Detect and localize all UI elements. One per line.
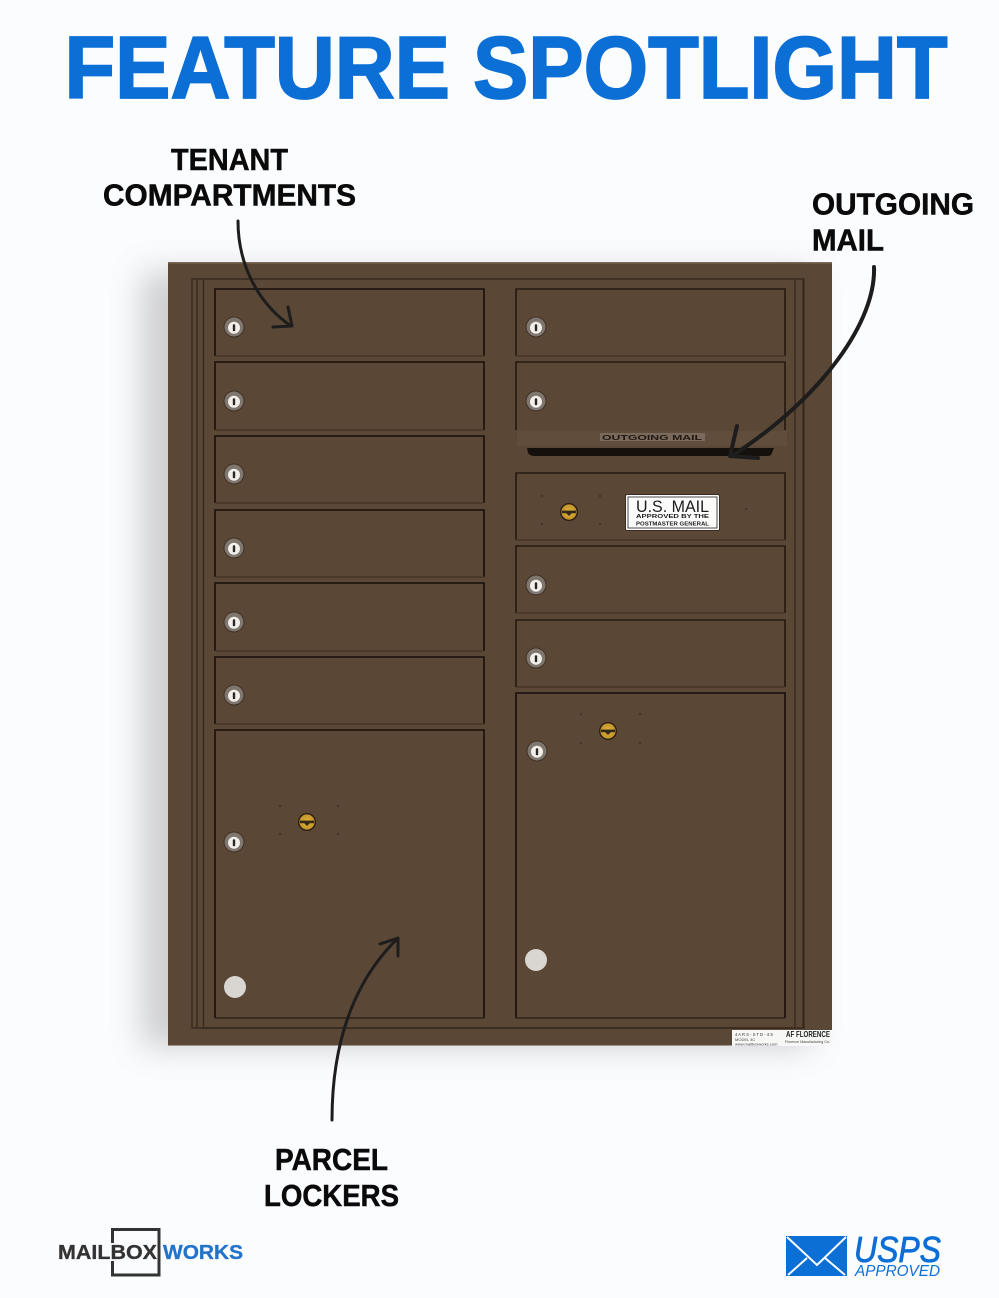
logo: usps approved: APPROVED (854, 1263, 940, 1280)
label: tenant compartments: TENANT (171, 143, 288, 177)
manufacturer label: www.mailboxworks.com (735, 1042, 778, 1046)
title: FEATURE SPOTLIGHT (64, 18, 948, 117)
left column tenant compartments (215, 289, 484, 724)
manufacturer label: MODEL 4C (735, 1037, 755, 1042)
logo: usps approved (786, 1229, 941, 1280)
keyed locks (224, 316, 548, 852)
right parcel locker door (516, 693, 785, 1018)
manufacturer label: 4 A R S - S T D - 4 S (735, 1032, 773, 1037)
label: tenant compartments: COMPARTMENTS (103, 178, 356, 212)
label: outgoing mail: OUTGOING (812, 188, 974, 222)
right door bottom edges (516, 356, 785, 687)
arrow: parcel lockers (332, 938, 398, 1120)
outgoing mail slot: OUTGOING MAIL (602, 433, 703, 442)
panel: mailbox unit (142, 262, 832, 1047)
right parcel door bottom edge (516, 1017, 785, 1019)
label: parcel lockers: PARCEL (275, 1143, 388, 1177)
U.S. Mail plate (626, 494, 720, 530)
left door bottom edges (215, 356, 484, 724)
logo: mailbox works (58, 1230, 243, 1275)
manufacturer label: Florence Manufacturing Co. (785, 1039, 830, 1044)
door bumpers (224, 949, 547, 998)
logo: usps approved: USPS (854, 1229, 941, 1270)
U.S. Mail plate: U.S. MAIL (636, 497, 709, 516)
logo: mailbox works: WORKS (163, 1242, 243, 1264)
label: outgoing mail: MAIL (812, 224, 884, 258)
manufacturer label: AF FLORENCE (786, 1030, 831, 1039)
label: parcel lockers: LOCKERS (264, 1179, 399, 1213)
manufacturer label (732, 1030, 832, 1046)
U.S. Mail plate: APPROVED BY THE (636, 514, 709, 520)
rivet marks (279, 495, 747, 835)
arrow: outgoing mail (730, 267, 874, 458)
arrow: tenant compartments (238, 221, 292, 327)
right column tenant compartments (516, 289, 785, 687)
left parcel locker door (215, 730, 484, 1018)
left parcel door bottom edge (215, 1017, 484, 1019)
icon: envelope (786, 1236, 847, 1276)
U.S. Mail plate: POSTMASTER GENERAL (636, 522, 710, 528)
inner frame lines (192, 279, 804, 1028)
logo: mailbox works: MAILBOX (58, 1242, 158, 1264)
brass postal locks (298, 503, 617, 831)
outgoing mail slot (517, 431, 787, 456)
